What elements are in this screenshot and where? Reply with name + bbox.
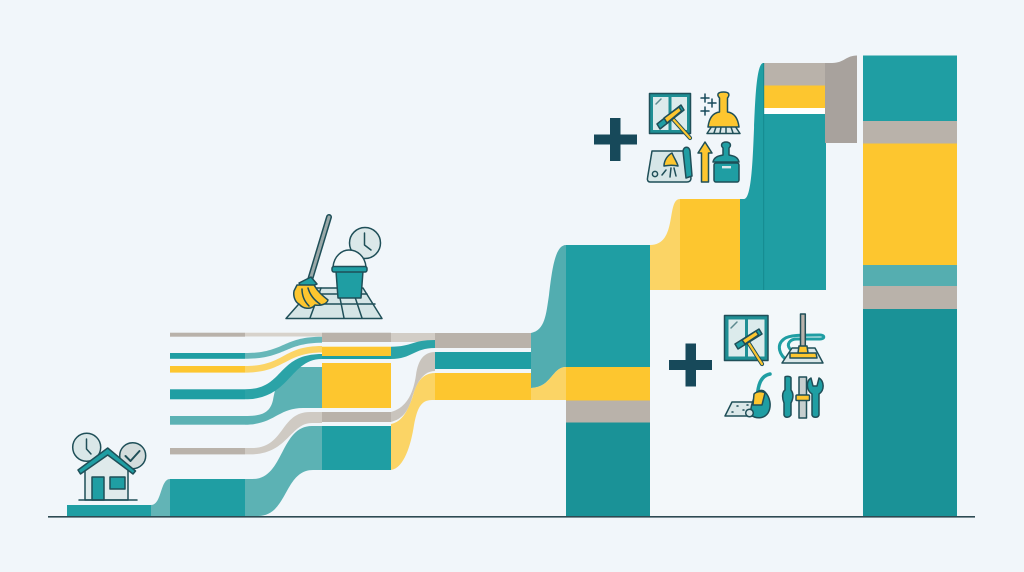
stage 5: tall column (566, 245, 650, 516)
icon: vacuum cleaner (725, 374, 770, 418)
baseline axis (48, 516, 975, 518)
stage 2: curved flows (245, 333, 322, 454)
icon: paint brush (713, 142, 739, 182)
final stacked total column (863, 56, 957, 516)
stage 4: grey teal yellow column (435, 333, 531, 400)
icon: sparkles (701, 94, 716, 115)
icon: wrenches and adjuster (783, 376, 823, 418)
stage 6: yellow flow and block (650, 199, 740, 290)
icon: window with squeegee (650, 94, 690, 138)
icon: arrow ruler (698, 142, 712, 182)
icon: blueprint map (647, 147, 692, 182)
pale panel under upper stage (650, 290, 862, 516)
icon group: lower cleaning tools (724, 314, 824, 418)
icon: window with squeegee (724, 316, 768, 364)
icon: floor mop with hose (779, 314, 824, 363)
icon: broom brush (707, 92, 740, 134)
stage 3: outgoing flows (391, 333, 435, 470)
stage 7: teal flow and stacked column (740, 63, 826, 290)
icon: house with clock and check (73, 433, 146, 500)
stage 1: base block and first flow (67, 426, 322, 516)
icon: mop bucket floor and clock (286, 217, 382, 318)
stage 7: grey outgoing flow (825, 56, 857, 143)
stage 3: middle column (322, 333, 391, 470)
icon group: upper renovation tools (647, 92, 740, 182)
stage 4: outgoing flows (531, 245, 566, 400)
plus sign lower (669, 344, 712, 386)
stage 2: left thin bars (170, 333, 245, 454)
plus sign upper (594, 118, 637, 161)
